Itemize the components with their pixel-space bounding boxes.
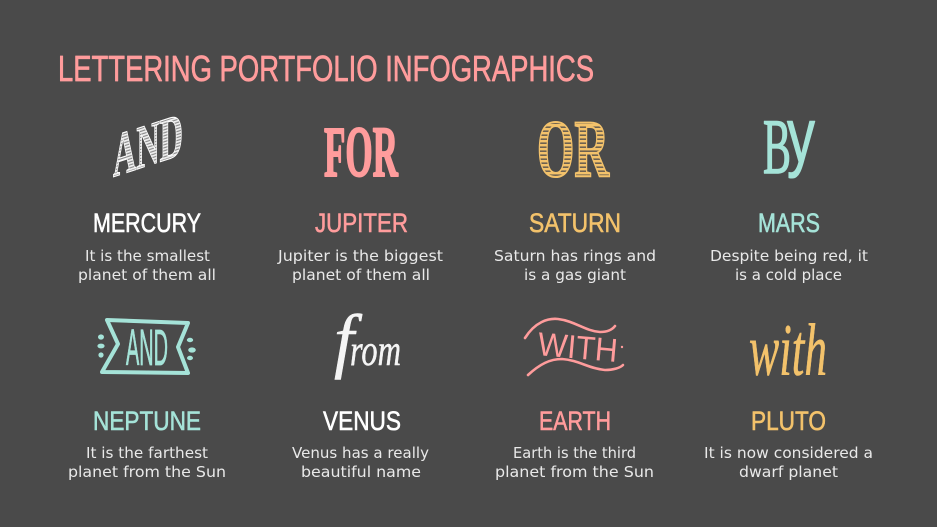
icon: from script lettering: f bbox=[334, 300, 363, 380]
panel: pluto bbox=[704, 310, 873, 481]
icon: WITH wave lettering: WITH bbox=[536, 325, 619, 369]
text: venus description bbox=[292, 445, 429, 481]
text: earth description bbox=[495, 445, 654, 481]
text: venus description: Venus has a really bbox=[292, 445, 429, 462]
panel: earth bbox=[495, 319, 654, 481]
icon: BY lettering: y bbox=[787, 93, 815, 179]
text: jupiter description bbox=[277, 248, 443, 284]
text: pluto description: It is now considered a bbox=[704, 445, 873, 462]
text: neptune description bbox=[68, 445, 226, 481]
heading: pluto: PLUTO bbox=[751, 406, 826, 436]
panel: neptune bbox=[68, 319, 226, 481]
text: mars description: is a cold place bbox=[735, 267, 842, 284]
text: saturn description bbox=[494, 248, 656, 284]
text: mercury description: planet of them all bbox=[78, 267, 216, 284]
text: venus description: beautiful name bbox=[301, 464, 421, 481]
panel: mercury bbox=[78, 99, 216, 284]
text: pluto description: dwarf planet bbox=[739, 464, 838, 481]
panel: mars bbox=[710, 93, 868, 284]
text: mercury description: It is the smallest bbox=[85, 248, 210, 265]
text: neptune description: planet from the Sun bbox=[68, 464, 226, 481]
text: pluto description bbox=[704, 445, 873, 481]
text: neptune description: It is the farthest bbox=[86, 445, 208, 462]
icon: BY lettering: B bbox=[763, 103, 791, 190]
heading: jupiter: JUPITER bbox=[315, 208, 408, 238]
text: mars description: Despite being red, it bbox=[710, 248, 868, 265]
heading: neptune: NEPTUNE bbox=[93, 406, 201, 436]
text: jupiter description: Jupiter is the biggest bbox=[277, 248, 443, 265]
panel: jupiter: FOR bbox=[324, 112, 398, 192]
text: saturn description: is a gas giant bbox=[524, 267, 626, 284]
icon: with script lettering: with bbox=[749, 310, 827, 392]
icon: AND banner: AND bbox=[126, 319, 168, 376]
heading: mars: MARS bbox=[758, 208, 820, 238]
icon: AND lettering: AND bbox=[113, 99, 183, 191]
text: mars description bbox=[710, 248, 868, 284]
panel: venus bbox=[292, 300, 429, 481]
text: jupiter description: planet of them all bbox=[292, 267, 430, 284]
heading: venus: VENUS bbox=[323, 406, 401, 436]
text: saturn description: Saturn has rings and bbox=[494, 248, 656, 265]
icon: from script lettering: rom bbox=[350, 326, 401, 375]
text: earth description: Earth is the third bbox=[513, 445, 636, 462]
icon: OR lettering: OR bbox=[537, 103, 609, 194]
title: LETTERING PORTFOLIO INFOGRAPHICS bbox=[58, 48, 594, 89]
panel: saturn bbox=[494, 103, 656, 284]
text: earth description: planet from the Sun bbox=[495, 464, 654, 481]
panel: jupiter bbox=[277, 112, 443, 284]
icon: AND banner bbox=[97, 319, 196, 376]
icon: WITH wave lettering bbox=[525, 319, 623, 375]
icon: from script lettering bbox=[334, 300, 401, 380]
heading: earth: EARTH bbox=[539, 406, 611, 436]
text: mercury description bbox=[78, 248, 216, 284]
heading: saturn: SATURN bbox=[529, 208, 621, 238]
heading: mercury: MERCURY bbox=[93, 208, 201, 238]
